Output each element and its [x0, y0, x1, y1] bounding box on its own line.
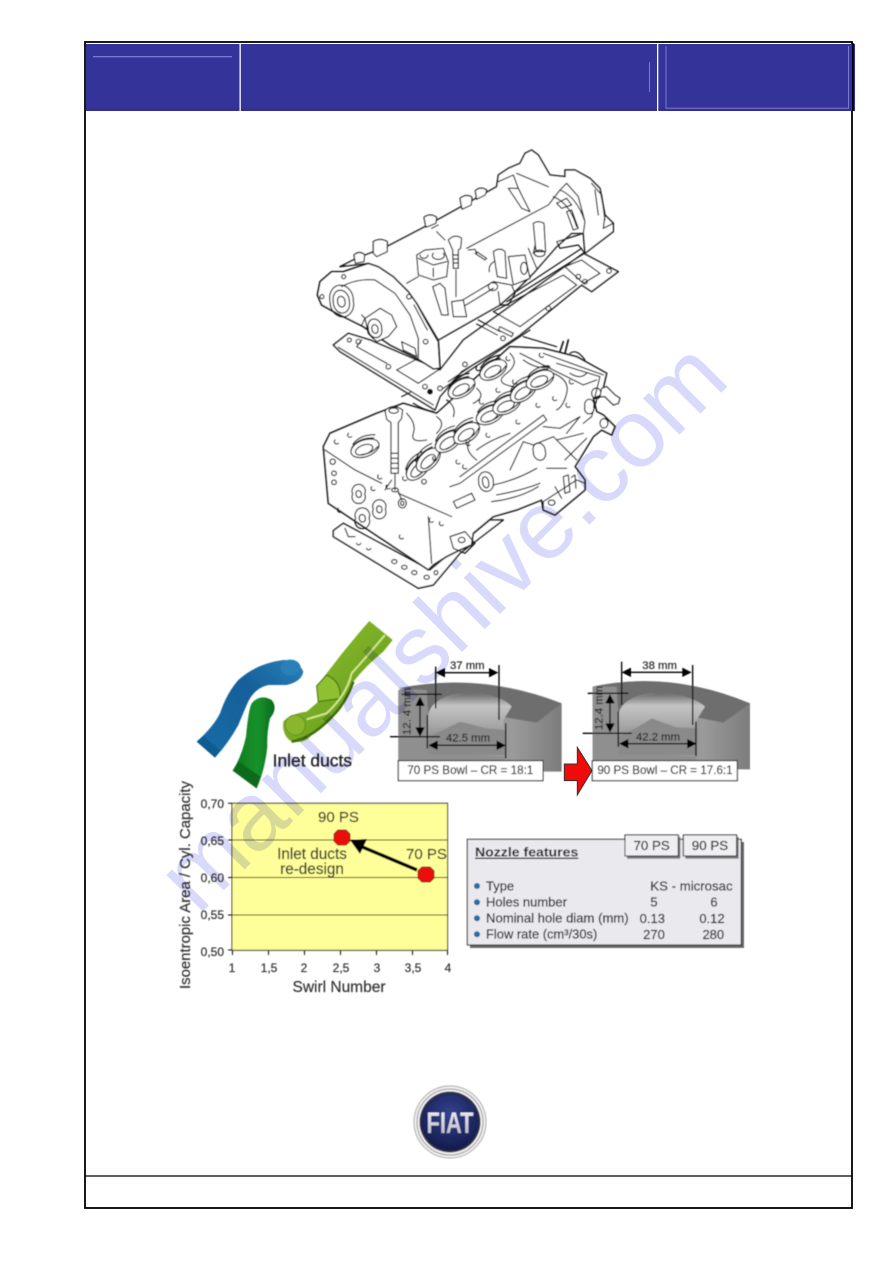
data labels	[277, 809, 447, 878]
feature rows: Nominal hole diam (mm)	[486, 911, 629, 926]
camshaft lobes	[347, 353, 557, 485]
y axis tick labels: 0,65	[201, 834, 224, 848]
label 90 PS bowl: 90 PS Bowl – CR = 17.6:1	[597, 764, 733, 777]
x axis tick labels: 1,5	[261, 961, 278, 975]
page frame	[85, 42, 852, 1208]
column tab 70 PS	[625, 835, 680, 859]
x axis tick labels: 3,5	[405, 961, 422, 975]
data point 70 PS	[418, 867, 434, 882]
nozzle features panel	[467, 835, 744, 948]
header band	[86, 43, 855, 111]
label 70 PS bowl: 70 PS Bowl – CR = 18:1	[407, 764, 533, 777]
olive duct	[283, 621, 393, 742]
data labels: re-design	[280, 861, 344, 878]
piston bowl 90 PS: 42.2 mm	[636, 731, 680, 743]
feature rows: KS - microsac	[650, 878, 733, 893]
dimension lines 70 PS	[390, 665, 506, 758]
engine cylinder head exploded line drawing	[317, 150, 620, 588]
upper gasket	[333, 253, 618, 410]
feature rows: 6	[710, 894, 718, 909]
feature rows: Type	[486, 878, 514, 893]
x axis tick labels: 2	[301, 961, 308, 975]
upper camshaft cover	[317, 150, 613, 369]
FIAT logo	[414, 1086, 486, 1158]
feature rows: Flow rate (cm³/30s)	[486, 927, 597, 942]
feature rows: 280	[702, 927, 724, 942]
data labels: 90 PS	[318, 809, 359, 826]
x axis title: Swirl Number	[292, 979, 386, 996]
data labels: Inlet ducts	[277, 846, 347, 863]
piston bowl 70 PS: 12. 4 mm	[402, 688, 414, 735]
feature rows: 0.12	[699, 911, 725, 926]
pipe fitting	[600, 387, 620, 405]
x axis tick labels: 1	[229, 961, 236, 975]
small bolt holes	[330, 353, 573, 539]
roller	[365, 308, 397, 342]
x axis tick labels: 2,5	[333, 961, 350, 975]
piston bowl 90 PS: 12.4 mm	[593, 686, 605, 730]
piston bowl 70 PS: 42.5 mm	[446, 732, 490, 744]
y axis tick labels	[201, 797, 224, 959]
y axis tick labels: 0,60	[201, 871, 224, 885]
watermark: manualshive.com	[136, 320, 747, 931]
dimension lines 90 PS	[583, 662, 696, 756]
x axis tick labels	[229, 961, 452, 975]
x axis tick labels: 3	[374, 961, 381, 975]
data point 90 PS	[334, 830, 350, 845]
label 70 PS bowl	[398, 761, 543, 781]
x axis tick labels: 4	[445, 961, 452, 975]
feature rows: 5	[650, 894, 658, 909]
inlet ducts label: Inlet ducts	[273, 751, 352, 771]
y axis tick labels: 0,70	[201, 797, 224, 811]
panel heading: Nozzle features	[475, 845, 578, 860]
y axis tick labels: 0,55	[201, 908, 224, 922]
column tab 70 PS: 70 PS	[633, 838, 670, 853]
feature rows: 270	[643, 927, 665, 942]
redesign arrow	[350, 839, 417, 870]
swirl chart	[177, 781, 452, 996]
head surface squiggles	[407, 353, 587, 460]
front face ports	[352, 484, 406, 529]
piston bowl 70 PS	[390, 660, 562, 781]
feature rows: 0.13	[640, 911, 665, 926]
red arrow between bowls	[564, 747, 592, 795]
timing cover	[317, 263, 440, 369]
piston bowl 70 PS: 37 mm	[450, 660, 485, 672]
inlet ducts illustration	[197, 621, 393, 788]
green duct	[233, 697, 275, 788]
y axis tick labels: 0,50	[201, 945, 224, 959]
column tab 90 PS: 90 PS	[692, 838, 728, 853]
long bolt	[385, 407, 403, 473]
lower gasket	[333, 520, 503, 588]
piston bowl 90 PS: 38 mm	[642, 660, 677, 672]
FIAT logo: FIAT	[426, 1107, 474, 1140]
data labels: 70 PS	[406, 846, 447, 863]
y axis title: Isoentropic Area / Cyl. Capacity	[177, 781, 194, 989]
column tab 90 PS	[683, 835, 739, 859]
piston bowl 90 PS	[583, 660, 750, 781]
feature rows: Holes number	[486, 894, 568, 909]
label 90 PS bowl	[592, 761, 737, 781]
cylinder head body	[323, 340, 620, 570]
feature rows	[474, 878, 733, 942]
blue duct	[197, 660, 303, 758]
cover studs and columns	[354, 188, 487, 263]
plot area	[232, 803, 448, 950]
